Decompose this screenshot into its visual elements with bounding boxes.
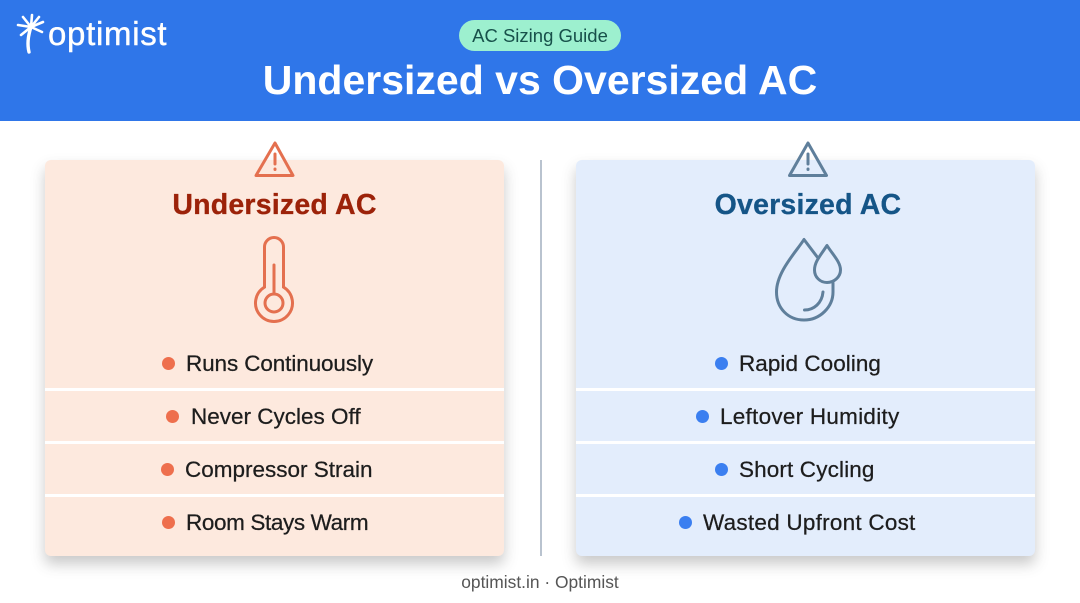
icon: water drops [775,238,842,322]
item: Short Cycling [739,457,874,482]
header band [0,0,1080,121]
icon: palm tree [16,14,44,54]
badge: AC Sizing Guide: AC Sizing Guide [472,25,608,46]
logo wordmark: optimist [48,15,167,52]
icon: warning triangle [254,141,294,177]
footer: optimist.in · Optimist [461,572,619,592]
item: Room Stays Warm [186,510,368,535]
item: Runs Continuously [186,351,373,376]
icon: thermometer [254,236,294,323]
panel: undersized AC [45,160,504,556]
list: oversized symptoms [576,351,1035,535]
heading: undersized: Undersized AC [172,189,377,221]
title: Undersized vs Oversized AC [263,57,817,103]
list: undersized symptoms [45,351,504,535]
heading: oversized: Oversized AC [715,189,901,221]
item: Never Cycles Off [191,404,361,429]
badge: AC Sizing Guide [459,20,621,51]
panel: oversized AC [576,160,1035,556]
item: Compressor Strain [185,457,373,482]
divider [540,160,542,556]
item: Wasted Upfront Cost [703,510,916,535]
item: Leftover Humidity [720,404,900,429]
logo: optimist [16,14,167,54]
item: Rapid Cooling [739,351,881,376]
icon: warning triangle [788,141,828,177]
